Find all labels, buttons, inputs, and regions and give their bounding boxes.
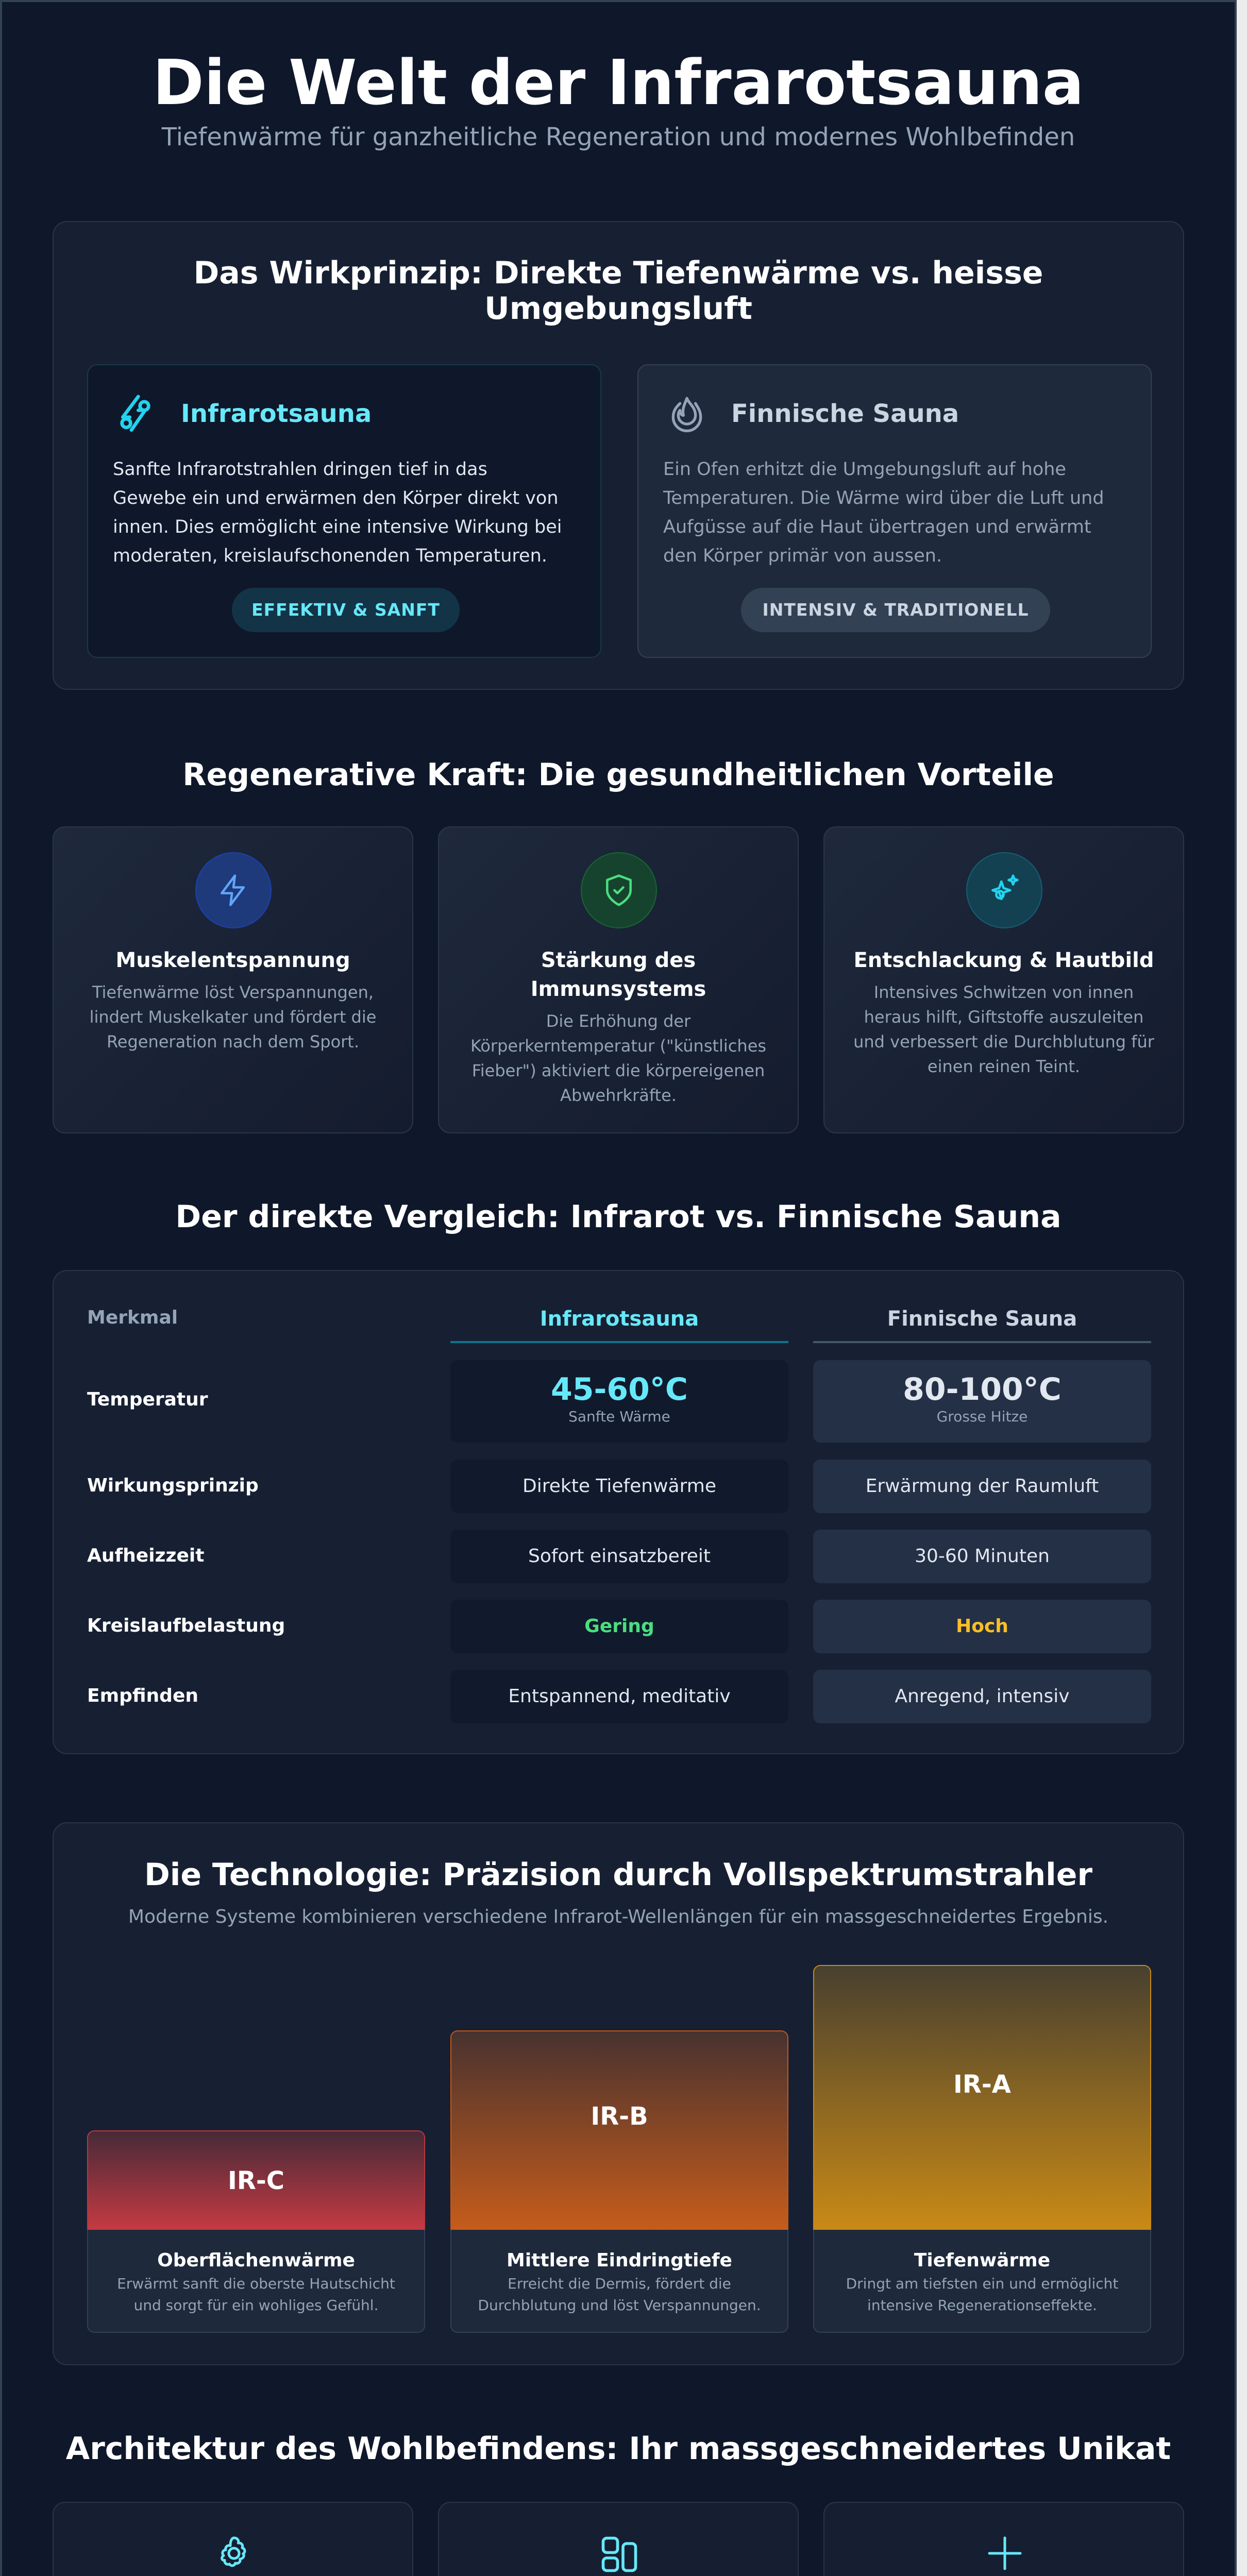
table header: Finnische Sauna — [887, 1307, 1077, 1331]
icon: shield circle — [581, 852, 657, 928]
icon: layout — [602, 2537, 637, 2572]
heading: Architektur: Architektur des Wohlbefindens: Ihr massgeschneidertes Unikat — [66, 2431, 1171, 2467]
card: Edle Materialien — [438, 2502, 799, 2576]
panel: Technologie — [53, 1822, 1184, 2365]
bar: IR-A — [813, 1965, 1151, 2333]
icon: bolt circle — [195, 852, 272, 928]
row: Kreislaufbelastung — [87, 1600, 1151, 1653]
panel: benefits — [53, 826, 1184, 1133]
text: Tiefenwärme löst Verspannungen, lindert Muskelkater und fördert die Regeneration nach dem Sport. — [90, 982, 376, 1052]
heading: Wirkprinzip: Umgebungsluft — [484, 291, 752, 327]
text: Infrarot description: Gewebe ein und erwärmen den Körper direkt von — [113, 488, 559, 509]
card: Entschlackung — [823, 826, 1184, 1133]
bar: IR-A: Dringt am tiefsten ein und ermöglicht — [846, 2275, 1118, 2292]
bar: IR-B: Durchblutung und löst Verspannungen. — [478, 2297, 761, 2314]
bar: IR-C: Erwärmt sanft die oberste Hautschicht — [117, 2275, 395, 2292]
bar: IR-C: und sorgt für ein wohliges Gefühl. — [133, 2297, 378, 2314]
row: Empfinden: Empfinden — [87, 1685, 198, 1706]
icon: flame — [672, 397, 702, 432]
heading: Infrarotsauna: Infrarotsauna — [181, 399, 372, 428]
text: Infrarot description: moderaten, kreislaufschonenden Temperaturen. — [113, 546, 547, 566]
text: Infrarot description: Sanfte Infrarotstrahlen dringen tief in das — [113, 459, 487, 480]
bar: IR-C — [87, 2130, 425, 2333]
row: Wirkungsprinzip — [87, 1460, 1151, 1513]
badge: Intensiv & traditionell: INTENSIV & TRADITIONELL — [762, 600, 1029, 620]
card: Muskelentspannung — [53, 826, 413, 1133]
heading: Vergleich: Der direkte Vergleich: Infrarot vs. Finnische Sauna — [175, 1199, 1061, 1235]
row: Aufheizzeit: 30-60 Minuten — [915, 1546, 1050, 1567]
badge: Effektiv & sanft — [232, 588, 460, 632]
title: Entschlackung & Hautbild — [853, 948, 1154, 972]
text: Finnisch description: Temperaturen. Die Wärme wird über die Luft und — [663, 488, 1104, 509]
text: Finnisch description — [663, 459, 1104, 566]
title — [531, 948, 706, 1001]
card: Infrarotsauna — [87, 364, 601, 658]
subtitle: Tiefenwärme für ganzheitliche Regeneration und modernes Wohlbefinden — [162, 123, 1075, 151]
text: Finnisch description: den Körper primär von aussen. — [663, 546, 942, 566]
row: Temperatur: Grosse Hitze — [937, 1408, 1027, 1425]
title: Stärkung des — [541, 948, 696, 972]
heading: Wirkprinzip: Das Wirkprinzip: Direkte Tiefenwärme vs. heisse — [193, 255, 1043, 291]
row: Wirkungsprinzip: Erwärmung der Raumluft — [866, 1476, 1099, 1497]
heading: Finnische Sauna: Finnische Sauna — [731, 399, 959, 428]
panel: Architektur cards — [53, 2502, 1184, 2576]
card: Immunsystem — [438, 826, 799, 1133]
title: Immunsystems — [531, 977, 706, 1001]
row: Kreislaufbelastung: Gering — [584, 1616, 654, 1637]
text: Finnisch description: Aufgüsse auf die Haut übertragen und erwärmt — [663, 517, 1091, 537]
row: Temperatur: Sanfte Wärme — [568, 1408, 670, 1425]
bar: IR-C: Oberflächenwärme — [157, 2250, 355, 2271]
icon: design — [221, 2537, 246, 2567]
row: Aufheizzeit: Sofort einsatzbereit — [528, 1546, 711, 1567]
row: Empfinden: Entspannend, meditativ — [508, 1686, 731, 1707]
bar: IR-B — [450, 2030, 788, 2333]
icon: plus — [988, 2537, 1021, 2570]
heading: Wirkprinzip — [193, 255, 1043, 327]
subtitle: Moderne Systeme kombinieren verschiedene Infrarot-Wellenlängen für ein massgeschneidertes Ergebnis. — [128, 1906, 1108, 1927]
panel: comparison table — [53, 1270, 1184, 1754]
bar: IR-B: IR-B — [591, 2102, 648, 2131]
bar: IR-B: Mittlere Eindringtiefe — [507, 2250, 732, 2271]
row: Temperatur: Temperatur — [87, 1389, 208, 1410]
table header: Merkmal — [87, 1307, 178, 1328]
icon: sparkles circle — [966, 852, 1042, 928]
row: Kreislaufbelastung: Kreislaufbelastung — [87, 1615, 285, 1636]
title: Muskelentspannung — [115, 948, 350, 972]
row: Wirkungsprinzip: Wirkungsprinzip — [87, 1475, 259, 1496]
row: Wirkungsprinzip: Direkte Tiefenwärme — [523, 1476, 716, 1497]
row: Temperatur — [87, 1360, 1151, 1443]
text: Finnisch description: Ein Ofen erhitzt die Umgebungsluft auf hohe — [663, 459, 1066, 480]
card: Schweizer Handwerk — [823, 2502, 1184, 2576]
panel: Wirkprinzip — [53, 221, 1184, 690]
bar: IR-A: Tiefenwärme — [914, 2250, 1050, 2271]
heading: Technologie: Die Technologie: Präzision durch Vollspektrumstrahler — [144, 1857, 1092, 1893]
text: Infrarot description — [113, 459, 562, 566]
title: Die Welt der Infrarotsauna — [153, 47, 1084, 119]
table header — [87, 1307, 1151, 1343]
text: Infrarot description: innen. Dies ermöglicht eine intensive Wirkung bei — [113, 517, 562, 537]
bar: IR-A: intensive Regenerationseffekte. — [867, 2297, 1097, 2314]
icon: lightning — [120, 395, 150, 432]
row: Aufheizzeit: Aufheizzeit — [87, 1545, 204, 1566]
card: Finnische Sauna — [637, 364, 1152, 658]
badge: Intensiv & traditionell — [741, 588, 1050, 632]
row: Kreislaufbelastung: Hoch — [956, 1616, 1008, 1637]
bar: IR-A: IR-A — [953, 2070, 1011, 2099]
row: Empfinden — [87, 1670, 1151, 1723]
row: Aufheizzeit — [87, 1530, 1151, 1583]
card: Individuelle Planung — [53, 2502, 413, 2576]
row: Temperatur: 45-60°C — [551, 1371, 688, 1408]
bar: IR-B: Erreicht die Dermis, fördert die — [508, 2275, 731, 2292]
bar: IR-C: IR-C — [228, 2166, 284, 2195]
badge: Effektiv & sanft: EFFEKTIV & SANFT — [251, 600, 440, 620]
row: Empfinden: Anregend, intensiv — [895, 1686, 1070, 1707]
text: Intensives Schwitzen von innen heraus hilft, Giftstoffe auszuleiten und verbessert die Durchblutung für einen reinen Teint. — [853, 982, 1154, 1076]
row: Temperatur: 80-100°C — [903, 1371, 1061, 1408]
table header: Infrarotsauna — [540, 1307, 699, 1331]
text: Die Erhöhung der Körperkerntemperatur ("künstliches Fieber") aktiviert die körpereigenen Abwehrkräfte. — [470, 1011, 766, 1105]
heading: Regenerative Kraft: Regenerative Kraft: Die gesundheitlichen Vorteile — [182, 757, 1054, 793]
